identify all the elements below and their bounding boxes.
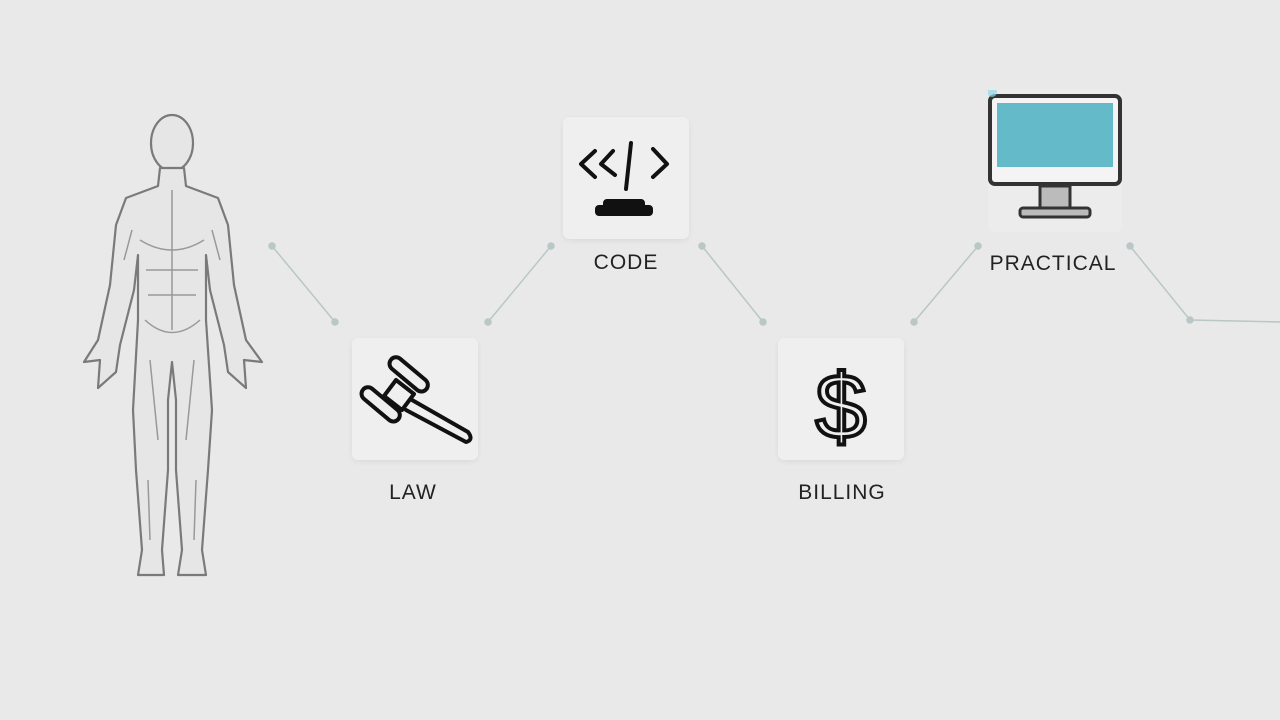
icon: code: [563, 117, 689, 239]
icon: gavel (LAW): [352, 338, 478, 460]
icon: monitor (PRACTICAL): [988, 90, 1122, 232]
label: PRACTICAL: PRACTICAL: [990, 252, 1116, 275]
icon: dollar (BILLING): $: [815, 356, 867, 458]
label: CODE: CODE: [594, 251, 658, 274]
icon: dollar (BILLING): [778, 338, 904, 460]
label: BILLING: BILLING: [798, 481, 886, 504]
label: LAW: LAW: [389, 481, 437, 504]
